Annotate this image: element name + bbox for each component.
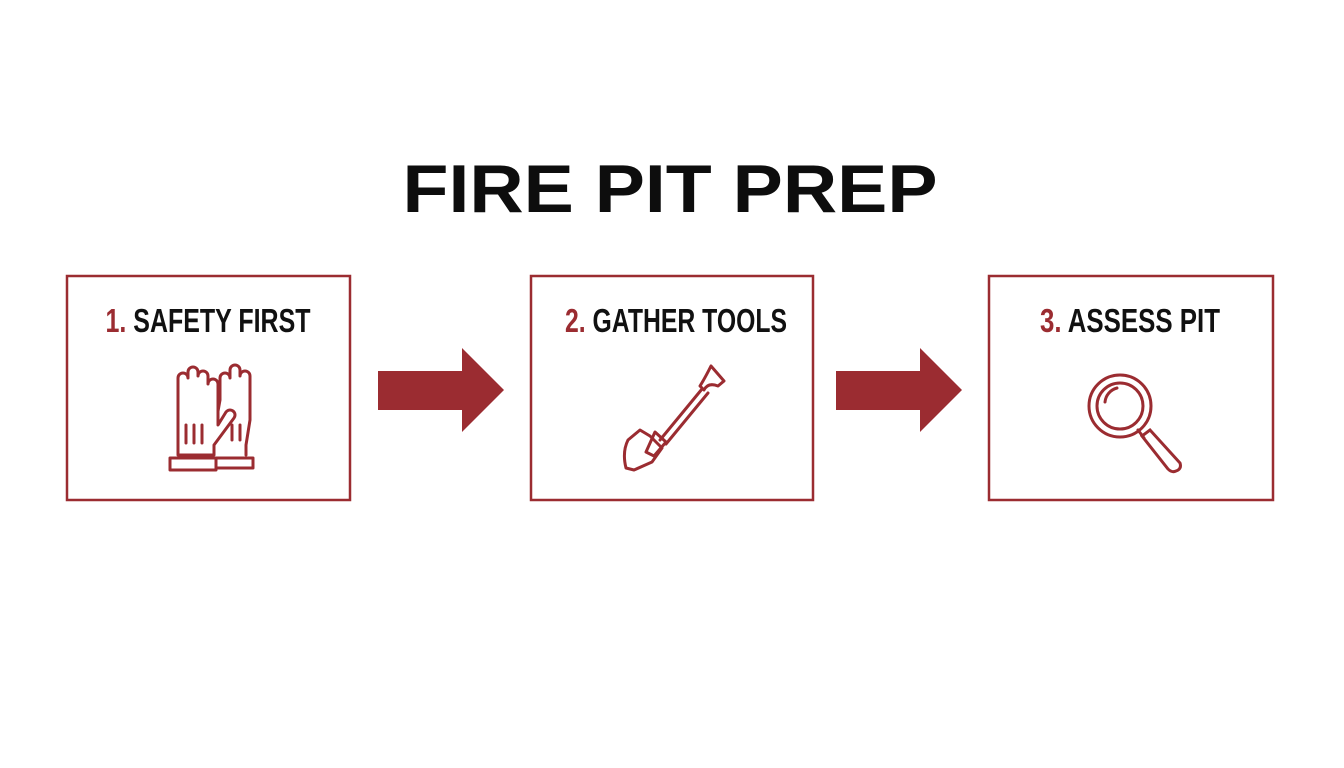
heading: assess pit: 3. ASSESS PIT [1040,302,1220,339]
heading: safety first: 1. SAFETY FIRST [106,302,310,339]
arrow 2 [836,348,962,432]
panel: assess pit [989,276,1273,500]
title: FIRE PIT PREP [402,151,938,227]
arrow 1 [378,348,504,432]
icon: gloves [170,365,253,470]
heading: gather tools: 2. GATHER TOOLS [565,302,787,339]
panel: safety first [67,276,350,500]
icon: shovel [624,366,724,470]
icon: magnifier [1089,375,1180,472]
panel: gather tools [531,276,813,500]
